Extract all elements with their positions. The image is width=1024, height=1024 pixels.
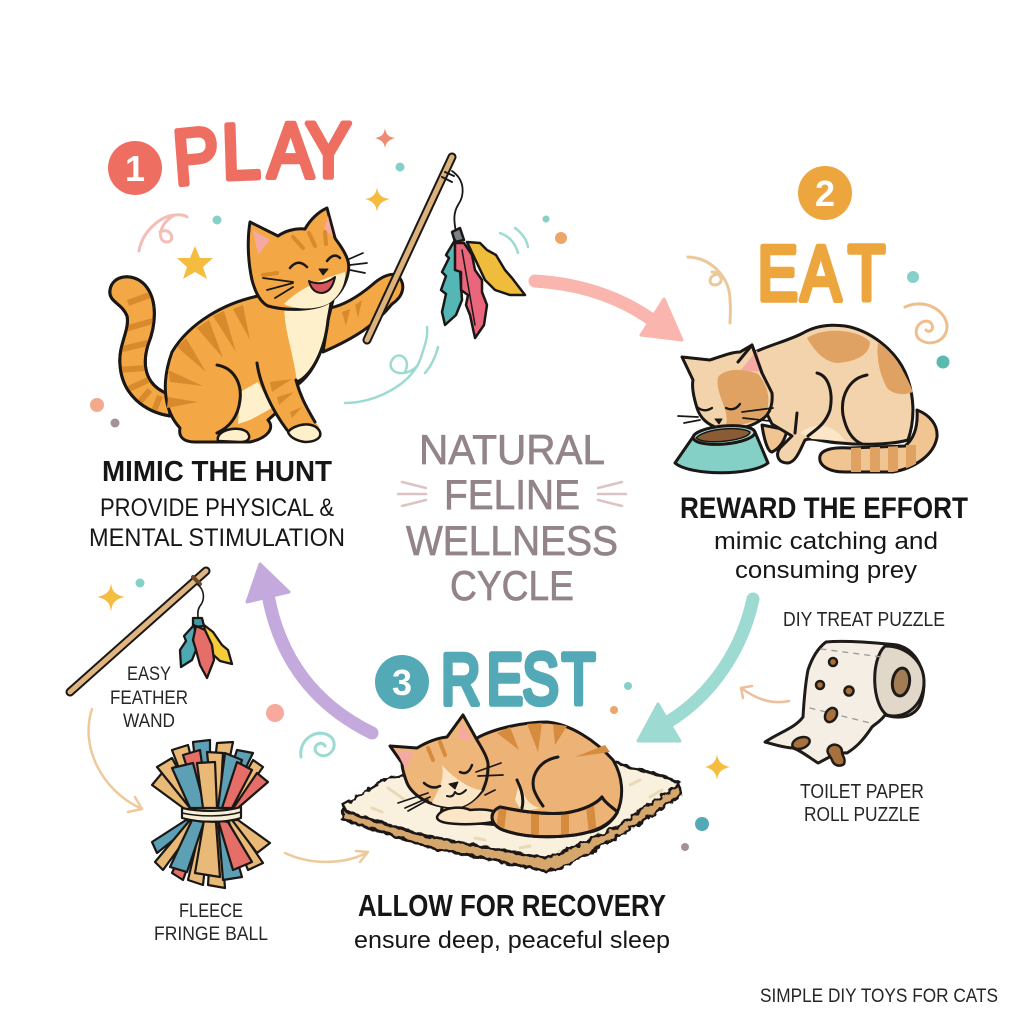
tail: [820, 410, 937, 472]
tail stripes: [500, 805, 593, 838]
tie band: [182, 807, 241, 822]
heading: 3 Rest: 3: [392, 662, 412, 703]
face: [697, 404, 740, 410]
mat texture: [372, 780, 662, 848]
bottom strips: [152, 820, 270, 888]
label: fleece fringe ball: FRINGE BALL: [154, 924, 268, 945]
heading: 1 Play: PLAY: [170, 106, 351, 202]
head: [390, 715, 488, 807]
cat body stripes: [167, 300, 362, 418]
illustration: easy feather wand: [70, 571, 232, 692]
back leg: [762, 425, 787, 452]
body: [755, 325, 913, 463]
top back strips: [152, 740, 268, 810]
head patch: [718, 370, 768, 425]
belly and haunch: [515, 780, 540, 812]
cat muzzle: [284, 272, 345, 308]
arrow: fleece ball to mat: [285, 851, 368, 862]
decorations near rest: [266, 704, 334, 757]
cat chest edge: [297, 298, 332, 382]
cat hip and leg lines: [217, 363, 315, 433]
footer caption: SIMPLE DIY TOYS FOR CATS: [760, 986, 998, 1007]
center title: WELLNESS: [406, 517, 618, 564]
tail outline: [492, 797, 617, 837]
center title: NATURAL: [419, 426, 605, 473]
tail stripes: [856, 445, 911, 474]
center title: CYCLE: [450, 562, 574, 609]
cat front leg: [257, 355, 320, 442]
label: easy feather wand: FEATHER: [110, 688, 188, 709]
ear: [741, 350, 762, 372]
toilet paper roll label: ROLL PUZZLE: [804, 804, 920, 826]
arrow: rest to play: [247, 564, 372, 733]
ears: [396, 722, 472, 770]
toilet paper roll label: [800, 781, 924, 826]
caption: mimic the hunt: PROVIDE PHYSICAL &: [100, 494, 334, 522]
mat: [342, 763, 682, 871]
tail: [492, 797, 617, 837]
center title: FELINE: [444, 471, 580, 518]
body stripes: [497, 723, 610, 757]
arrow: wand to fleece ball: [89, 709, 142, 812]
arrow: eat to rest: [638, 599, 753, 741]
body lines: [795, 373, 867, 444]
illustration: sleeping cat on mat: [342, 715, 682, 871]
caption: allow for recovery: ensure deep, peaceful sleep: [354, 927, 670, 954]
heading: 3 Rest: REST: [441, 639, 595, 720]
DIY treat puzzle label: DIY TREAT PUZZLE: [783, 609, 945, 631]
caption: allow for recovery: ALLOW FOR RECOVERY: [358, 888, 666, 923]
paws: [437, 808, 500, 824]
arrow: puzzle pointer: [741, 686, 789, 702]
cat face: [290, 256, 340, 268]
decorations around eat: [688, 257, 950, 368]
cat belly: [238, 382, 272, 424]
sparkle and dot: left: [97, 578, 144, 612]
toilet paper roll label: TOILET PAPER: [800, 781, 924, 803]
heading: 2 Eat: 2: [815, 173, 835, 214]
cat tail outline: [110, 277, 170, 416]
illustration: eating cat: [675, 325, 937, 474]
face: [424, 765, 472, 787]
illustration: fleece fringe ball: [152, 740, 270, 888]
cat body: [165, 296, 333, 442]
body patches: [807, 331, 913, 394]
arrow: play to eat: [535, 281, 682, 340]
cat ears: [253, 216, 333, 255]
head stripes and muzzle: [428, 742, 445, 760]
illustration: sparkles around play: [90, 128, 567, 428]
label: easy feather wand: [110, 664, 188, 732]
caption: mimic the hunt: MIMIC THE HUNT: [102, 456, 332, 488]
caption: reward the effort: REWARD THE EFFORT: [680, 492, 968, 525]
belly: [800, 426, 845, 441]
cat raised arm: [323, 274, 403, 352]
caption: allow for recovery: [354, 888, 670, 954]
illustration: toilet paper roll: [765, 641, 924, 766]
cat head: [248, 208, 349, 309]
caption: mimic the hunt: MENTAL STIMULATION: [89, 524, 345, 552]
caption: mimic the hunt: [89, 456, 345, 552]
label: fleece fringe ball: [154, 901, 268, 945]
heading: 2 Eat: [758, 166, 885, 317]
body: [440, 722, 622, 832]
caption: reward the effort: [680, 492, 968, 584]
cat paws: [218, 424, 320, 442]
center title: [406, 426, 618, 609]
decorations lower right: [610, 682, 730, 851]
center title flourishes: [398, 482, 626, 506]
illustration: feather wand: [367, 157, 525, 340]
label: fleece fringe ball: FLEECE: [179, 901, 243, 922]
top front strips: [172, 750, 252, 808]
caption: reward the effort: mimic catching and: [714, 528, 938, 555]
head: [682, 345, 772, 428]
cat head stripes: [263, 232, 326, 275]
heading: 1 Play: 1: [125, 148, 145, 189]
illustration: playing cat: [110, 208, 403, 442]
label: easy feather wand: EASY: [127, 664, 171, 685]
cat chest: [284, 296, 332, 382]
cat tail stripes: [118, 293, 160, 416]
bowl: [675, 432, 768, 473]
label: easy feather wand: WAND: [123, 711, 175, 732]
caption: reward the effort: consuming prey: [735, 557, 917, 584]
heading: 2 Eat: EAT: [758, 230, 885, 317]
